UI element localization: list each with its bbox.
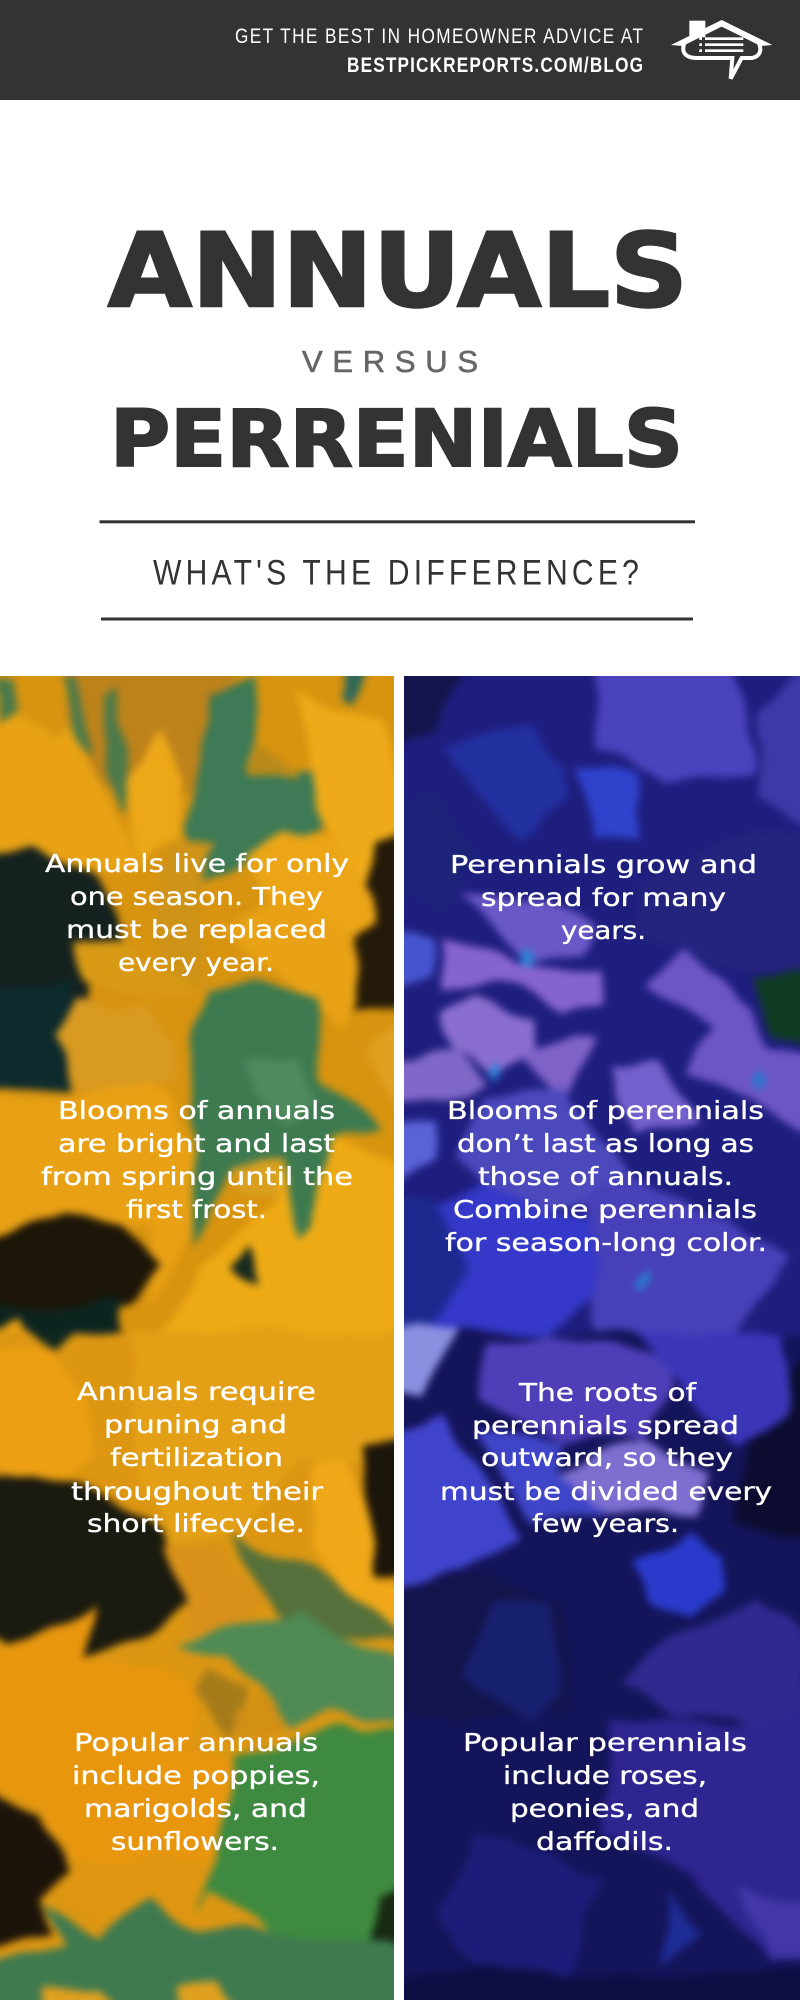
text: annuals life span: Annuals live for only <box>45 849 349 878</box>
header text: GET THE BEST IN HOMEOWNER ADVICE AT <box>235 24 643 49</box>
text: popular perennials: peonies, and <box>510 1794 699 1823</box>
text: perennials blooms: Combine perennials <box>453 1195 757 1224</box>
text: perennials roots: perennials spread <box>472 1411 739 1440</box>
text: perennials blooms: for season-long color. <box>445 1228 767 1257</box>
text: annuals life span: every year. <box>118 948 274 977</box>
question heading: WHAT'S THE DIFFERENCE? <box>153 552 639 592</box>
text: perennials roots: The roots of <box>518 1378 697 1407</box>
text: perennials life span: spread for many <box>481 883 726 912</box>
text: popular perennials <box>463 1728 747 1856</box>
icon: house speech bubble logo <box>671 20 772 79</box>
text: annuals care: Annuals require <box>77 1377 316 1406</box>
text: annuals life span: must be replaced <box>66 915 327 944</box>
text: popular annuals: include poppies, <box>72 1761 320 1790</box>
text: annuals blooms <box>41 1096 353 1224</box>
text: perennials blooms: Blooms of perennials <box>447 1096 764 1125</box>
header text: BESTPICKREPORTS.COM/BLOG <box>347 53 643 78</box>
text: popular perennials: daffodils. <box>536 1827 673 1856</box>
panel: annuals <box>0 676 394 2000</box>
text: annuals care: fertilization <box>110 1443 283 1472</box>
text: popular annuals: Popular annuals <box>74 1728 318 1757</box>
text: annuals life span: one season. They <box>70 882 323 911</box>
text: perennials roots: outward, so they <box>481 1443 733 1472</box>
text: popular perennials: Popular perennials <box>463 1728 747 1757</box>
text: perennials blooms: those of annuals. <box>478 1162 733 1191</box>
panel: perennials <box>404 676 800 2000</box>
text: perennials roots: must be divided every <box>440 1477 772 1506</box>
text: perennials life span <box>450 850 757 945</box>
text: perennials life span: years. <box>561 916 646 945</box>
subtitle: versus: VERSUS <box>302 344 478 379</box>
text: annuals blooms: from spring until the <box>41 1162 353 1191</box>
text: annuals care <box>71 1377 324 1538</box>
text: annuals care: throughout their <box>71 1477 324 1506</box>
text: annuals care: pruning and <box>104 1410 287 1439</box>
text: popular perennials: include roses, <box>503 1761 707 1790</box>
header bar <box>0 0 800 100</box>
header text <box>235 24 643 78</box>
text: perennials roots <box>440 1378 772 1538</box>
text: annuals blooms: Blooms of annuals <box>58 1096 335 1125</box>
text: annuals blooms: first frost. <box>126 1195 267 1224</box>
text: annuals care: short lifecycle. <box>87 1509 305 1538</box>
photo: sunflowers <box>0 676 394 2000</box>
text: annuals life span <box>45 849 349 977</box>
text: popular annuals <box>72 1728 320 1856</box>
text: popular annuals: sunflowers. <box>111 1827 279 1856</box>
photo: hydrangeas <box>404 676 800 2000</box>
text: perennials roots: few years. <box>532 1509 679 1538</box>
text: annuals blooms: are bright and last <box>58 1129 335 1158</box>
text: perennials blooms: don’t last as long as <box>457 1129 754 1158</box>
text: perennials life span: Perennials grow and <box>450 850 757 879</box>
title: perrenials: PERRENIALS <box>110 395 683 485</box>
title: annuals: ANNUALS <box>108 212 688 331</box>
text: perennials blooms <box>445 1096 767 1257</box>
text: popular annuals: marigolds, and <box>84 1794 307 1823</box>
